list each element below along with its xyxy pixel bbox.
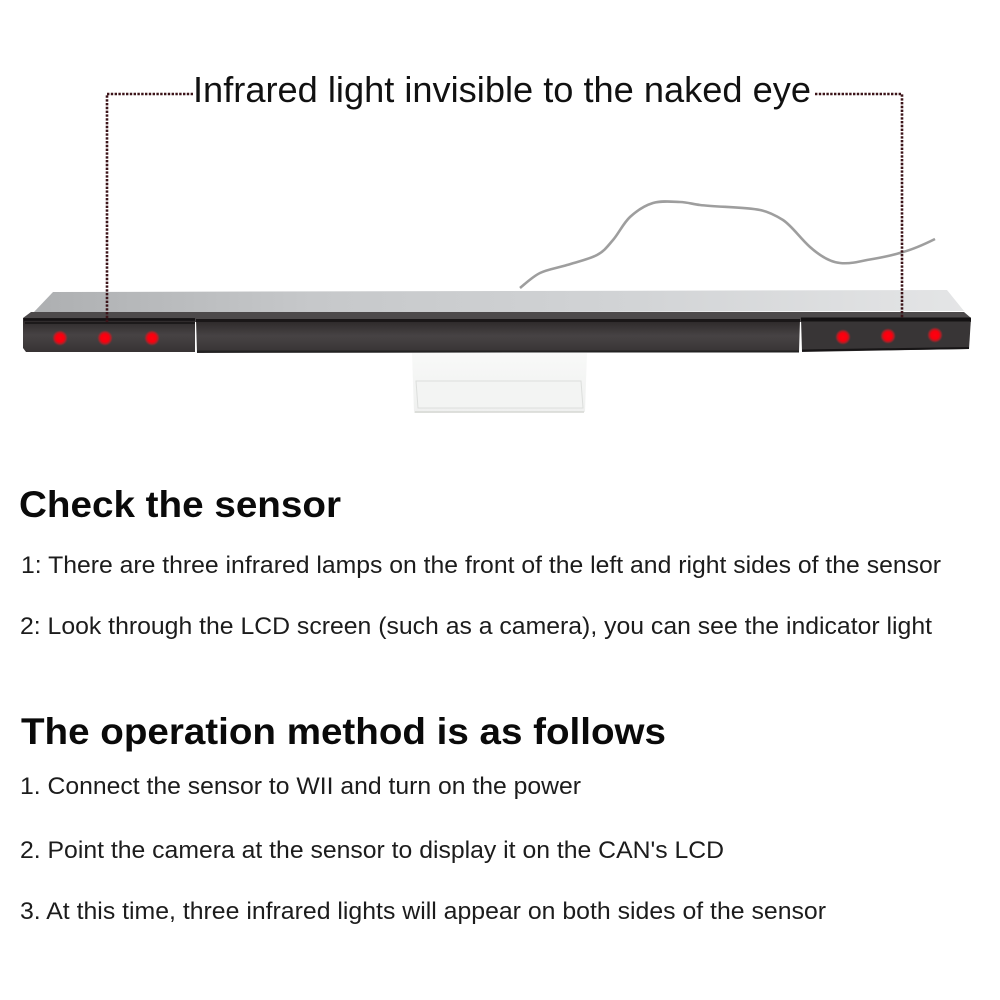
text: operation step 1: 1. Connect the sensor to WII and turn on the power xyxy=(20,773,581,800)
heading: operation method: The operation method is as follows xyxy=(21,711,666,752)
sensor cable xyxy=(520,201,935,288)
silver top surface xyxy=(33,290,964,313)
infrared lamps left xyxy=(52,330,160,346)
title: Infrared light invisible to the naked eye xyxy=(193,69,811,110)
left sensor module xyxy=(23,318,195,352)
icon: sensor bar product photo xyxy=(23,201,971,413)
text: operation step 3: 3. At this time, three infrared lights will appear on both sides of the sensor xyxy=(20,898,826,925)
text: check step 2: 2: Look through the LCD screen (such as a camera), you can see the indicator light xyxy=(20,613,932,640)
infrared lamps right xyxy=(835,327,943,345)
dark rear edge xyxy=(23,312,971,322)
right sensor module xyxy=(801,318,971,352)
text: operation step 2: 2. Point the camera at the sensor to display it on the CAN's LCD xyxy=(20,837,724,864)
dotted leader line left xyxy=(107,94,193,322)
acrylic stand xyxy=(412,353,587,413)
dotted leader line right xyxy=(815,94,902,318)
middle sensor module xyxy=(196,319,800,353)
text: check step 1: 1: There are three infrared lamps on the front of the left and right sides of the sensor xyxy=(21,552,941,579)
heading: check the sensor: Check the sensor xyxy=(19,484,341,525)
